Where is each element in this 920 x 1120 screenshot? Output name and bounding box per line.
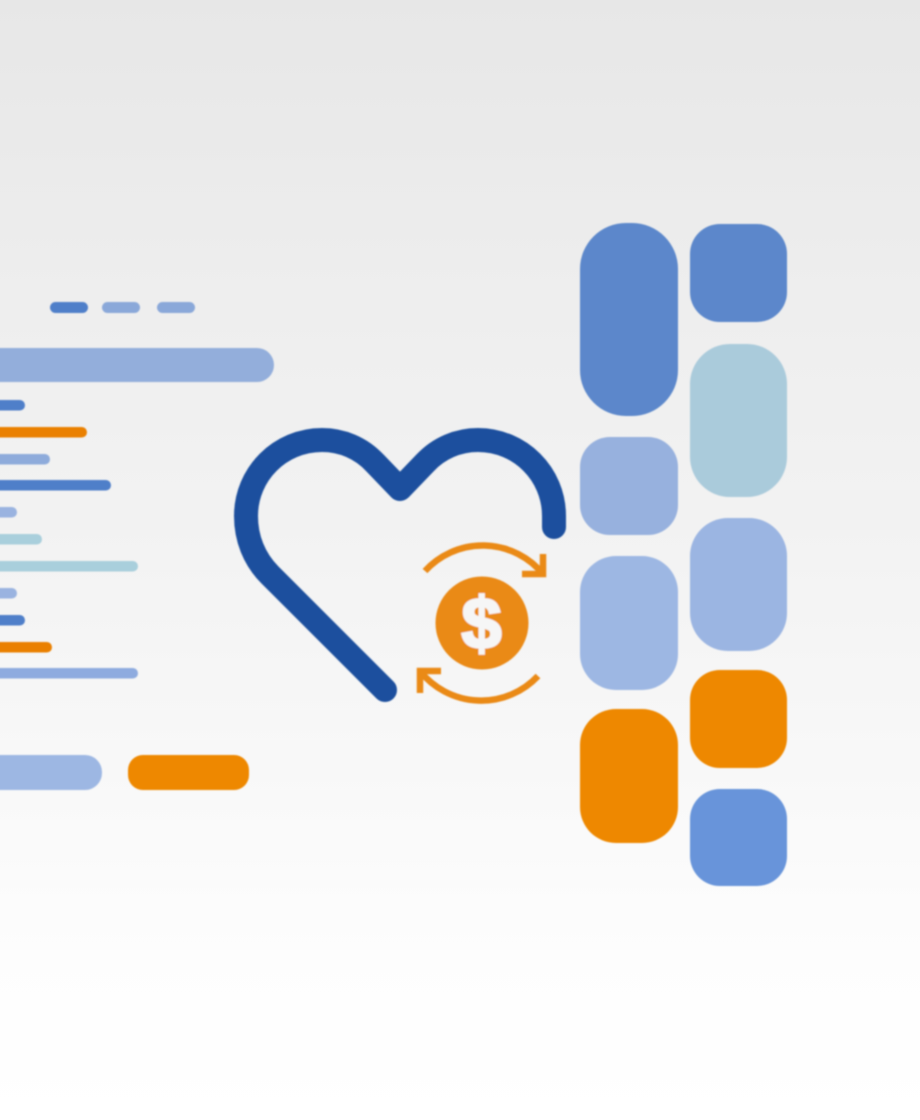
- block column: left: [580, 223, 678, 843]
- header bar: [0, 348, 274, 382]
- icon: heart outline: [246, 440, 554, 690]
- coin: [436, 576, 528, 670]
- bottom blue button: [0, 755, 102, 790]
- icon: dollar coin with circular arrows: [420, 545, 543, 701]
- bottom arrow: [420, 671, 538, 701]
- block column: right: [690, 224, 787, 886]
- dollar sign: $: [461, 584, 502, 664]
- artwork: [0, 223, 787, 886]
- top arrow: [425, 545, 543, 574]
- legend dashes: [50, 302, 195, 313]
- horizontal bar list: [0, 400, 138, 678]
- bottom orange button: [128, 755, 249, 790]
